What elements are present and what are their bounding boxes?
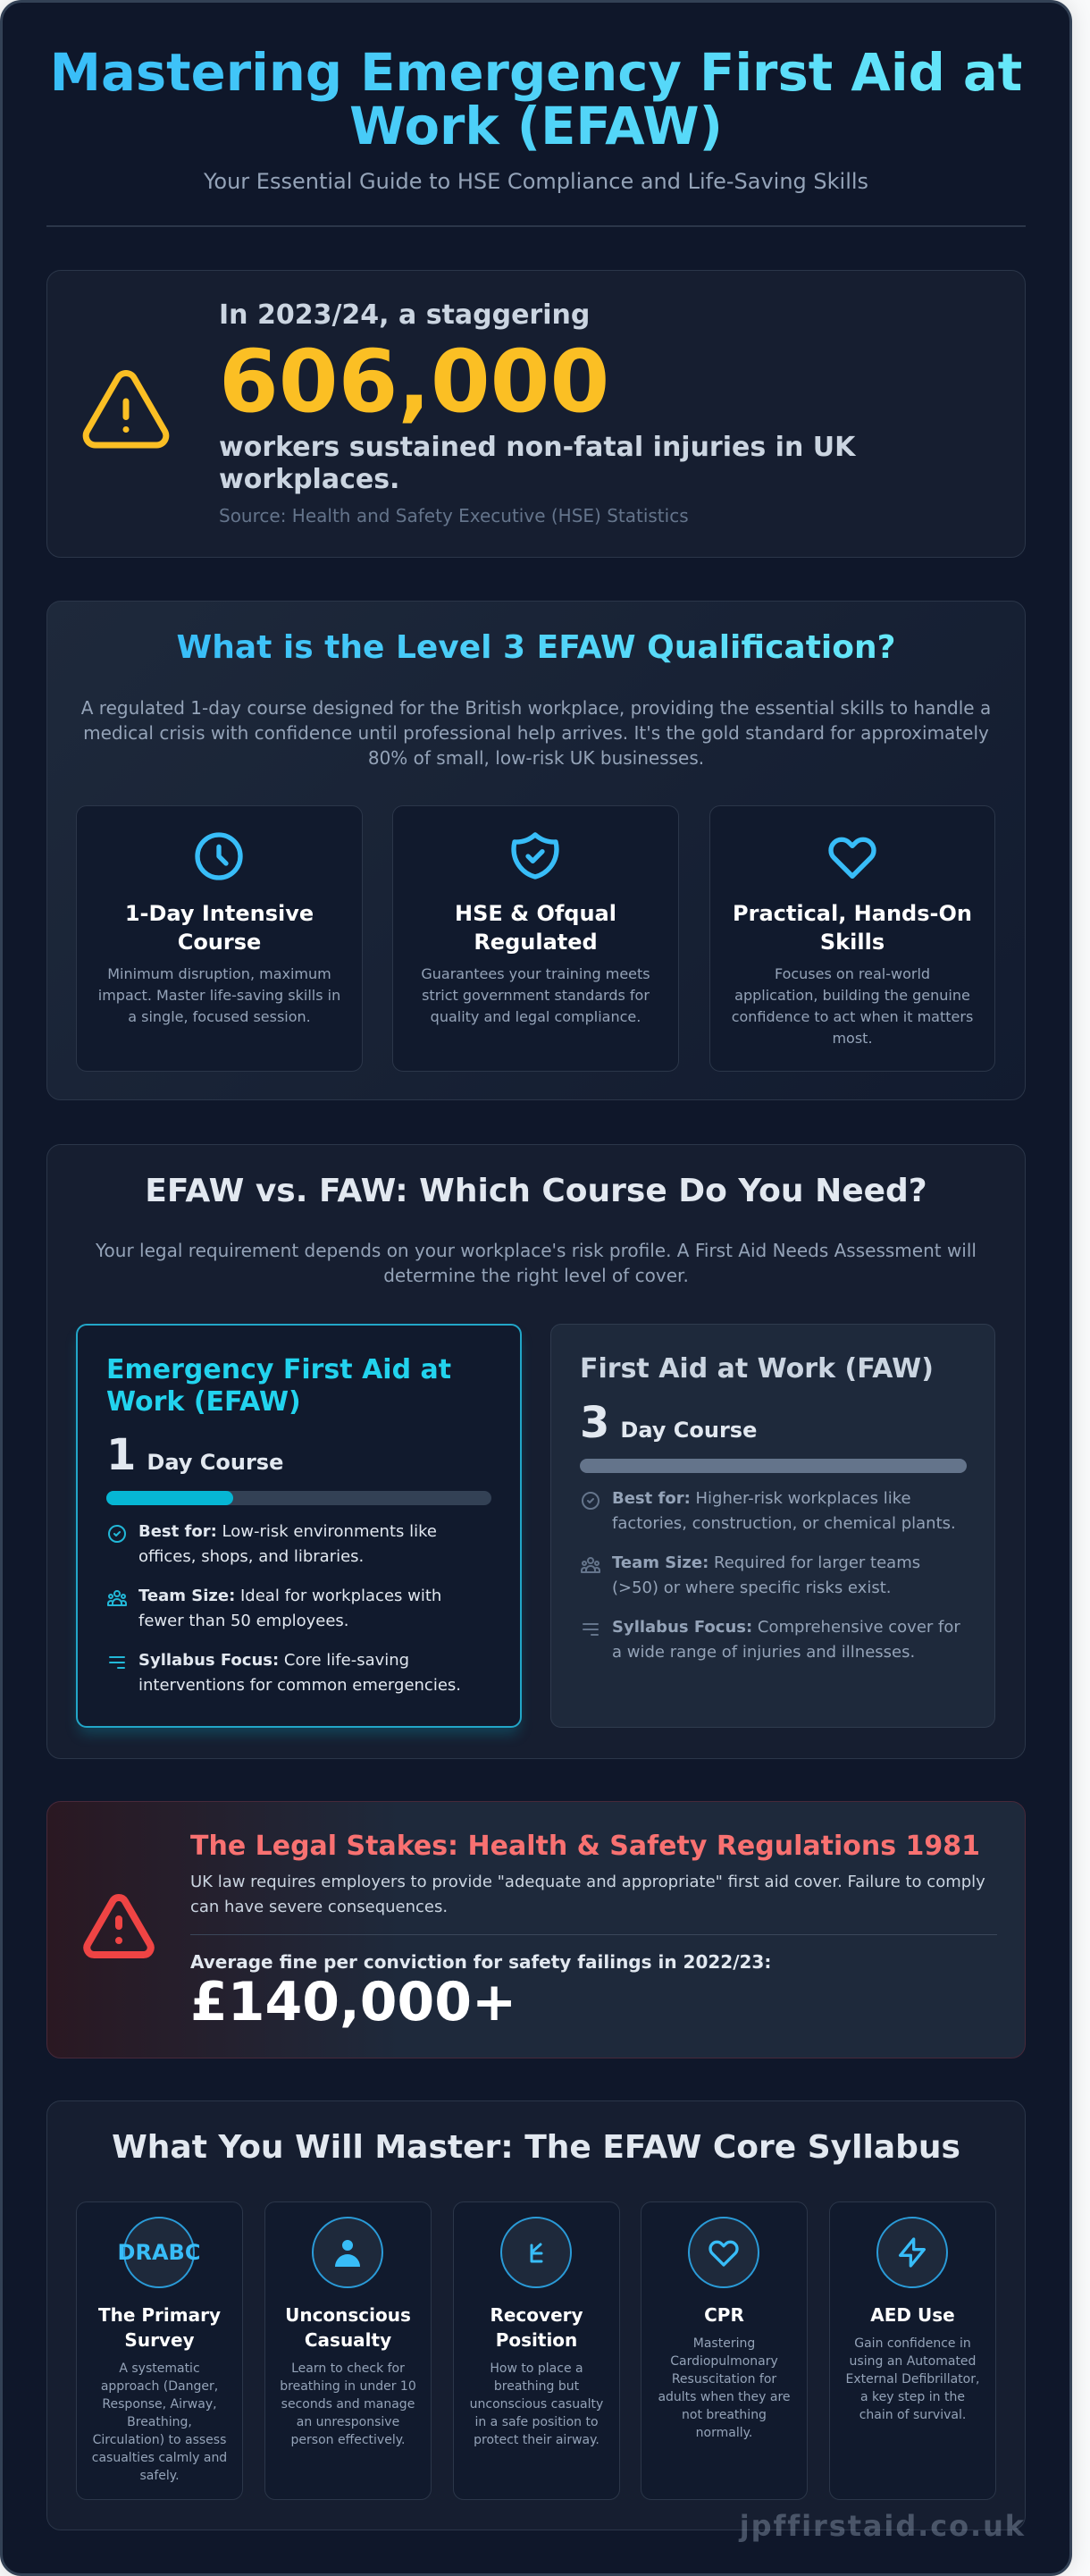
- item text: Best for: Higher-risk workplaces like: [612, 1489, 911, 1508]
- intro paragraph: determine the right level of cover.: [383, 1265, 689, 1286]
- item text: Syllabus Focus: Core life-saving: [138, 1651, 409, 1670]
- panel: injury statistic: [46, 270, 1026, 558]
- card: FAW: [550, 1324, 995, 1728]
- card title: [285, 2304, 411, 2351]
- heading: What You Will Master: The EFAW Core Syllabus: [112, 2129, 960, 2166]
- card title: CPR: [704, 2304, 744, 2326]
- icon: clock: [195, 832, 243, 880]
- item text: offices, shops, and libraries.: [138, 1547, 364, 1566]
- card text: quality and legal compliance.: [431, 1008, 641, 1025]
- card text: A systematic: [119, 2361, 200, 2376]
- item text: Best for: Low-risk environments like: [138, 1522, 437, 1541]
- heading: What is the Level 3 EFAW Qualification?: [176, 629, 895, 666]
- card title: [98, 2304, 221, 2351]
- card text: Guarantees your training meets: [421, 965, 650, 982]
- title: [46, 46, 1026, 154]
- intro paragraph: medical crisis with confidence until professional help arrives. It's the gold standard for approximately: [83, 722, 989, 744]
- title: Work (EFAW): [349, 97, 723, 156]
- icon: lightning bolt: [876, 2217, 948, 2288]
- card text: Learn to check for: [291, 2361, 405, 2376]
- card title: 1-Day Intensive: [125, 901, 314, 926]
- icon: list: [109, 1656, 125, 1669]
- card text: Cardiopulmonary: [670, 2354, 778, 2369]
- card text: Gain confidence in: [854, 2336, 971, 2351]
- card title: Survey: [124, 2329, 195, 2351]
- item: best for: [582, 1489, 956, 1533]
- card title: [454, 2302, 619, 2353]
- card: EFAW: [76, 1324, 522, 1728]
- icon: heart: [688, 2217, 759, 2288]
- card title: [125, 901, 314, 955]
- card text: unconscious casualty: [470, 2397, 603, 2412]
- intro paragraph: Your legal requirement depends on your workplace's risk profile. A First Aid Needs Assessment will: [96, 1240, 977, 1261]
- card: primary survey: [76, 2201, 243, 2500]
- fine amount: £140,000+: [190, 1971, 516, 2033]
- icon: list: [583, 1623, 599, 1636]
- card: AED use: [829, 2201, 996, 2500]
- card text: not breathing: [682, 2408, 767, 2422]
- course title: Emergency First Aid at: [106, 1354, 451, 1385]
- duration bar: [106, 1491, 491, 1505]
- legal heading: The Legal Stakes: Health & Safety Regulations 1981: [190, 1831, 980, 1862]
- card text: seconds and manage: [281, 2397, 415, 2412]
- item text: Syllabus Focus: Comprehensive cover for: [612, 1618, 960, 1637]
- card text: approach (Danger,: [101, 2379, 218, 2394]
- card title: Unconscious: [285, 2304, 411, 2326]
- card: CPR: [641, 2201, 808, 2500]
- intro paragraph: [96, 1240, 977, 1286]
- item text: [138, 1651, 461, 1695]
- course title: Work (EFAW): [106, 1386, 301, 1418]
- title: Mastering Emergency First Aid at: [50, 43, 1022, 103]
- card text: breathing but: [494, 2379, 579, 2394]
- card text: Circulation) to assess: [93, 2433, 226, 2447]
- card title: Skills: [820, 930, 885, 955]
- card title: The Primary: [98, 2304, 221, 2326]
- legal paragraph: [190, 1873, 985, 1916]
- icon: recovery position: [500, 2217, 572, 2288]
- card: recovery position: [453, 2201, 620, 2500]
- card title: AED Use: [870, 2304, 955, 2326]
- item: syllabus focus: [583, 1618, 960, 1662]
- item text: (>50) or where specific risks exist.: [612, 1578, 892, 1597]
- panel: legal stakes: [46, 1801, 1026, 2058]
- card title: Practical, Hands-On: [733, 901, 972, 926]
- course title: [106, 1354, 451, 1418]
- icon: check circle: [582, 1492, 600, 1510]
- icon: DRABC: [123, 2217, 195, 2288]
- item: best for: [108, 1522, 437, 1566]
- card text: normally.: [696, 2426, 752, 2440]
- card title: Position: [496, 2329, 577, 2351]
- card text: an unresponsive: [297, 2415, 399, 2429]
- card text: breathing in under 10: [280, 2379, 416, 2394]
- icon: group: [107, 1590, 127, 1606]
- statistic description: [219, 432, 856, 495]
- card title: [733, 901, 972, 955]
- card: regulated: [392, 805, 679, 1072]
- item text: fewer than 50 employees.: [138, 1612, 349, 1630]
- card text: Resuscitation for: [672, 2372, 776, 2387]
- item text: Team Size: Ideal for workplaces with: [138, 1587, 441, 1605]
- card text: [830, 2335, 995, 2424]
- item text: interventions for common emergencies.: [138, 1676, 461, 1695]
- item text: Team Size: Required for larger teams: [612, 1553, 920, 1572]
- card text: [454, 2360, 619, 2449]
- course title: First Aid at Work (FAW): [580, 1353, 934, 1385]
- card text: using an Automated: [850, 2354, 976, 2369]
- subtitle: Your Essential Guide to HSE Compliance and Life-Saving Skills: [204, 169, 868, 194]
- legal paragraph: UK law requires employers to provide "adequate and appropriate" first aid cover. Failure to comply: [190, 1873, 985, 1891]
- panel: core syllabus: [46, 2100, 1026, 2530]
- duration: 3 Day Course: [580, 1398, 757, 1448]
- card text: adults when they are: [658, 2390, 791, 2404]
- card title: Course: [178, 930, 261, 955]
- item text: factories, construction, or chemical plants.: [612, 1514, 956, 1533]
- item: syllabus focus: [109, 1651, 461, 1695]
- legal paragraph: can have severe consequences.: [190, 1898, 448, 1916]
- card title: Regulated: [474, 930, 598, 955]
- card text: strict government standards for: [422, 987, 650, 1004]
- card text: most.: [832, 1030, 873, 1047]
- card title: HSE & Ofqual: [455, 901, 616, 926]
- item text: a wide range of injuries and illnesses.: [612, 1643, 915, 1662]
- panel: what is the qualification: [46, 601, 1026, 1100]
- item text: [138, 1522, 437, 1566]
- card text: Mastering: [693, 2336, 755, 2351]
- card text: [92, 2361, 227, 2483]
- card text: casualties calmly and: [92, 2451, 227, 2465]
- card text: [421, 965, 650, 1025]
- item: team size: [107, 1587, 441, 1630]
- item text: [612, 1489, 956, 1533]
- icon: group: [581, 1557, 600, 1573]
- intro paragraph: A regulated 1-day course designed for the British workplace, providing the essential skills to handle a: [81, 697, 991, 719]
- icon: heart: [828, 837, 876, 879]
- icon: warning triangle: [82, 370, 170, 449]
- card text: impact. Master life-saving skills in: [98, 987, 340, 1004]
- card text: Response, Airway,: [102, 2397, 217, 2412]
- card: unconscious casualty: [264, 2201, 432, 2500]
- duration bar: [580, 1459, 967, 1473]
- statistic description: workers sustained non-fatal injuries in UK: [219, 432, 855, 463]
- statistic description: workplaces.: [219, 464, 399, 495]
- icon: check circle: [108, 1525, 126, 1543]
- fine label: Average fine per conviction for safety failings in 2022/23:: [190, 1951, 771, 1973]
- card text: chain of survival.: [859, 2408, 966, 2422]
- card text: Minimum disruption, maximum: [107, 965, 331, 982]
- card: practical skills: [709, 805, 995, 1072]
- panel: EFAW vs FAW comparison: [46, 1144, 1026, 1759]
- intro paragraph: [81, 697, 991, 769]
- card text: [265, 2360, 431, 2449]
- card text: a single, focused session.: [128, 1008, 311, 1025]
- card text: How to place a: [490, 2361, 583, 2376]
- big number: 606,000: [219, 332, 609, 432]
- intro paragraph: 80% of small, low-risk UK businesses.: [368, 747, 704, 769]
- card text: person effectively.: [291, 2433, 405, 2447]
- heading: EFAW vs. FAW: Which Course Do You Need?: [145, 1173, 927, 1209]
- card text: [641, 2335, 807, 2442]
- card title: Recovery: [490, 2304, 583, 2326]
- card text: [98, 965, 340, 1025]
- card text: Focuses on real-world: [775, 965, 930, 982]
- item text: [612, 1553, 920, 1597]
- item: team size: [581, 1553, 920, 1597]
- watermark: jpffirstaid.co.uk: [740, 2509, 1026, 2543]
- card: 1-day course: [76, 805, 363, 1072]
- icon: shield check: [511, 832, 559, 880]
- duration: 1 Day Course: [106, 1430, 283, 1480]
- icon: red warning triangle: [83, 1894, 155, 1958]
- card text: application, building the genuine: [734, 987, 970, 1004]
- card text: Breathing,: [127, 2415, 192, 2429]
- card text: External Defibrillator,: [846, 2372, 979, 2387]
- source note: Source: Health and Safety Executive (HSE) Statistics: [219, 505, 689, 526]
- card text: in a safe position to: [474, 2415, 599, 2429]
- icon: person: [312, 2217, 383, 2288]
- card text: protect their airway.: [474, 2433, 600, 2447]
- card text: a key step in the: [860, 2390, 965, 2404]
- statistic intro: In 2023/24, a staggering: [219, 299, 590, 331]
- card text: [732, 965, 973, 1047]
- DRABC label: DRABC: [118, 2240, 200, 2265]
- card text: safely.: [139, 2469, 180, 2483]
- card text: confidence to act when it matters: [732, 1008, 973, 1025]
- card title: [455, 901, 616, 955]
- item text: [612, 1618, 960, 1662]
- item text: [138, 1587, 441, 1630]
- card title: Casualty: [305, 2329, 391, 2351]
